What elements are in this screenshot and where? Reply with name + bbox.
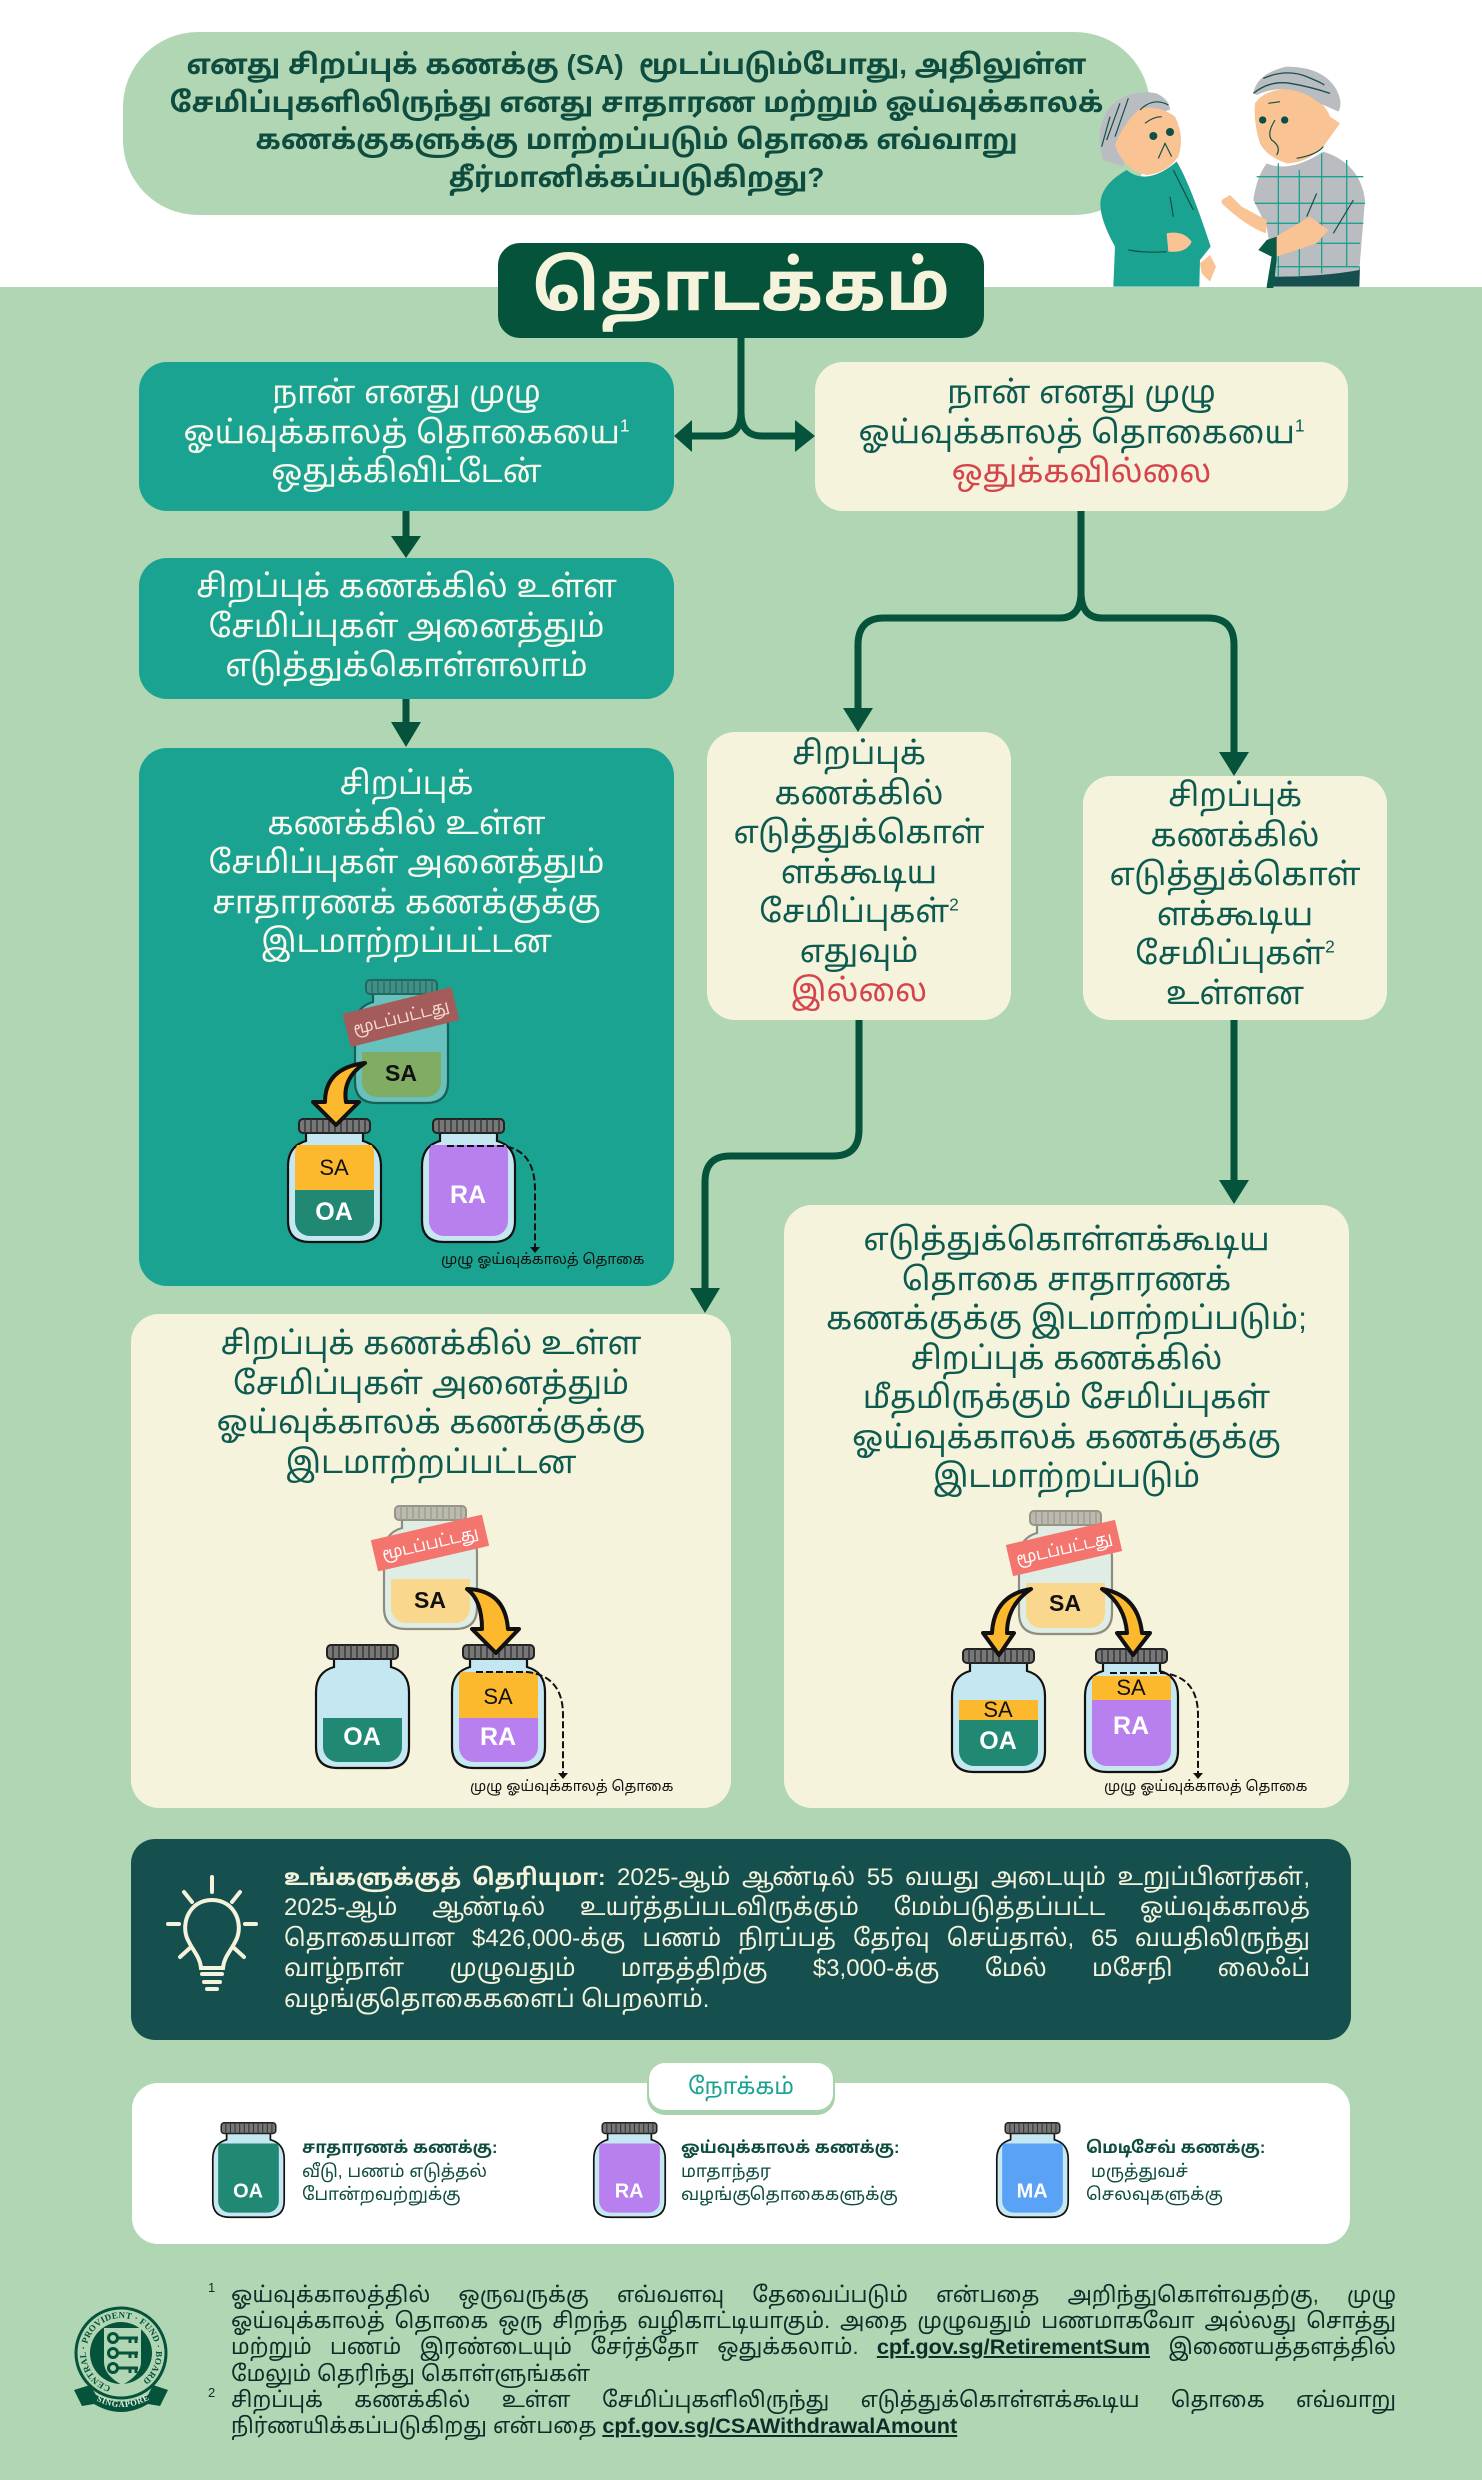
header question bubble: சேமிப்புகளிலிருந்து எனது சாதாரண மற்றும் ஓய்வுக்காலக்: [170, 86, 1103, 118]
caption: full retirement sum: முழு ஓய்வுக்காலத் தொகை: [470, 1779, 673, 1795]
panel: transferred to retirement account: ஓய்வுக்காலக் கணக்குக்கு: [217, 1404, 645, 1440]
jars diagram: [314, 1505, 568, 1779]
text: OA: [302, 2139, 498, 2206]
box: no withdrawable savings: சேமிப்புகள்2: [759, 893, 959, 929]
label: closed: மூடப்பட்டது: [380, 1524, 481, 1566]
jar: OA: [316, 1645, 409, 1768]
text: RA: ஓய்வுக்காலக் கணக்கு:: [681, 2139, 899, 2157]
jar: RA: [592, 2122, 666, 2218]
jar: OA: OA: [233, 2180, 263, 2202]
text: RA: வழங்குதொகைகளுக்கு: [681, 2184, 898, 2204]
jar: SA and OA: SA: [319, 1155, 349, 1180]
jar: SA and RA: RA: [480, 1723, 516, 1751]
box: can withdraw all: [139, 558, 674, 699]
dashed marker: [447, 1146, 535, 1248]
jar: closed SA: [355, 980, 448, 1103]
jar: closed SA: SA: [1049, 1590, 1081, 1616]
text: MA: மருத்துவச்: [1091, 2161, 1188, 2181]
jar: RA: RA: [615, 2180, 644, 2202]
box: no withdrawable savings: சிறப்புக்: [792, 735, 926, 771]
box: not set aside: [815, 362, 1348, 511]
box: no withdrawable savings: எடுத்துக்கொள்: [733, 814, 985, 850]
text: RA: [681, 2139, 899, 2206]
footnote 1: ஓய்வுக்காலத் தொகை ஒரு சிறந்த வழிகாட்டியாகும். அதை முழுவதும் பணமாகவோ அல்லது சொத்து: [231, 2308, 1396, 2333]
jar: OA: OA: [343, 1723, 381, 1751]
jar: closed SA: [1019, 1511, 1112, 1634]
box: has withdrawable savings: கணக்கில்: [1150, 816, 1320, 852]
footnote 2: 2: [208, 2385, 215, 2400]
text: did you know: உங்களுக்குத் தெரியுமா: 2025-ஆம் ஆண்டில் 55 வயது அடையும் உறுப்பினர்கள்,: [284, 1864, 1310, 1891]
box: set aside full retirement sum: [139, 362, 674, 511]
start title box: [498, 243, 984, 338]
logo: CPF board: CENTRAL · PROVIDENT · FUND · BOARD: [80, 2312, 162, 2392]
panel: transferred to retirement account: இடமாற்றப்பட்டன: [286, 1444, 576, 1480]
legend: ordinary account: [212, 2122, 498, 2218]
panel: did you know: [131, 1839, 1351, 2040]
panel: split transfer: ஓய்வுக்காலக் கணக்குக்கு: [852, 1418, 1281, 1454]
start title box: தொடக்கம்: [532, 248, 950, 325]
jar: RA: RA: [450, 1181, 486, 1209]
text: OA: சாதாரணக் கணக்கு:: [302, 2139, 498, 2157]
box: has withdrawable savings: உள்ளன: [1166, 974, 1304, 1010]
jar: closed SA: SA: [414, 1587, 446, 1613]
text: did you know: [284, 1864, 1310, 2015]
label: closed: மூடப்பட்டது: [351, 997, 452, 1041]
box: not set aside: ஒதுக்கவில்லை: [952, 453, 1211, 489]
jar: SA and OA: [288, 1119, 381, 1242]
label: closed: [343, 987, 459, 1047]
box: not set aside: ஓய்வுக்காலத் தொகையை1: [858, 414, 1304, 450]
panel: transferred to retirement account: சேமிப்புகள் அனைத்தும்: [233, 1364, 629, 1400]
text: MA: [1086, 2138, 1265, 2206]
arrow: SA to OA: [313, 1063, 365, 1125]
caption: full retirement sum: முழு ஓய்வுக்காலத் தொகை: [1104, 1779, 1307, 1795]
footnote 2: சிறப்புக் கணக்கில் உள்ள சேமிப்புகளிலிருந்து எடுத்துக்கொள்ளக்கூடிய தொகை எவ்வாறு: [231, 2387, 1396, 2412]
header question bubble: [123, 32, 1150, 215]
icon: light bulb: [166, 1875, 258, 1991]
arrow: SA to OA: [983, 1589, 1031, 1655]
box: no withdrawable savings: ளக்கூடிய: [781, 854, 937, 890]
jar: SA and RA: [1085, 1649, 1178, 1772]
panel: transferred to ordinary account: கணக்கில் உள்ள: [267, 804, 546, 840]
jar: closed SA: [384, 1506, 477, 1629]
jar: RA: [422, 1119, 515, 1242]
box: set aside full retirement sum: ஓய்வுக்காலத் தொகையை1: [184, 414, 629, 450]
panel: split transfer: கணக்குக்கு இடமாற்றப்படும்;: [826, 1300, 1307, 1336]
text: OA: வீடு, பணம் எடுத்தல்: [302, 2161, 487, 2181]
panel: transferred to ordinary account: இடமாற்றப்பட்டன: [261, 923, 552, 959]
jar: SA and RA: RA: [1113, 1712, 1149, 1740]
footnote 1: மேலும் தெரிந்து கொள்ளுங்கள்: [231, 2361, 590, 2386]
box: no withdrawable savings: கணக்கில்: [774, 774, 944, 810]
box: has withdrawable savings: ளக்கூடிய: [1157, 896, 1313, 932]
header question bubble: கணக்குகளுக்கு மாற்றப்படும் தொகை எவ்வாறு: [255, 124, 1018, 155]
panel: transferred to ordinary account: சேமிப்புகள் அனைத்தும்: [208, 844, 605, 880]
panel: split transfer: எடுத்துக்கொள்ளக்கூடிய: [863, 1221, 1270, 1257]
label: closed: [371, 1515, 489, 1571]
footnote 1: [208, 2280, 1396, 2388]
dashed marker: [1110, 1673, 1198, 1774]
box: no withdrawable savings: இல்லை: [791, 972, 927, 1008]
label: closed: மூடப்பட்டது: [1014, 1529, 1115, 1571]
panel: split transfer: சிறப்புக் கணக்கில்: [911, 1340, 1222, 1376]
jar: SA and RA: SA: [1116, 1675, 1146, 1700]
label: closed: [1006, 1520, 1122, 1576]
man: [1222, 67, 1365, 288]
text: MA: மெடிசேவ் கணக்கு:: [1086, 2139, 1265, 2157]
box: not set aside: நான் எனது முழு: [947, 374, 1216, 410]
woman: [1100, 92, 1216, 287]
box: has withdrawable savings: [1083, 776, 1387, 1020]
footnote 2: நிர்ணயிக்கப்படுகிறது என்பதை cpf.gov.sg/CSAWithdrawalAmount: [231, 2413, 957, 2438]
box: set aside full retirement sum: நான் எனது முழு: [272, 374, 541, 410]
footnote 1: ஓய்வுக்காலத்தில் ஒருவருக்கு எவ்வளவு தேவைப்படும் என்பதை அறிந்துகொள்வதற்கு, முழு: [231, 2282, 1396, 2307]
text: OA: போன்றவற்றுக்கு: [302, 2184, 461, 2204]
box: no withdrawable savings: எதுவும்: [800, 932, 918, 968]
box: has withdrawable savings: எடுத்துக்கொள்: [1109, 856, 1361, 892]
jar: SA and RA: SA: [483, 1684, 513, 1709]
tab: purpose: நோக்கம்: [688, 2073, 794, 2099]
jar: MA: MA: [1017, 2180, 1048, 2202]
panel: transferred to retirement account: [131, 1314, 731, 1808]
panel: split transfer: தொகை சாதாரணக்: [902, 1260, 1231, 1296]
logo: CPF board: SINGAPORE: [96, 2395, 149, 2407]
text: did you know: 2025-ஆம் ஆண்டில் உயர்த்தப்படவிருக்கும் மேம்படுத்தப்பட்ட ஓய்வுக்காலத்: [284, 1894, 1310, 1921]
legend: medisave account: [996, 2122, 1265, 2218]
box: set aside full retirement sum: ஒதுக்கிவிட்டேன்: [271, 453, 542, 489]
jar: SA and OA: OA: [315, 1198, 353, 1226]
legend: retirement account: [592, 2122, 899, 2218]
jars diagram: [950, 1510, 1203, 1779]
arrow: SA to RA: [1102, 1589, 1150, 1655]
box: no withdrawable savings: [707, 732, 1011, 1020]
text: did you know: வழங்குதொகைகளைப் பெறலாம்.: [284, 1986, 709, 2013]
illustration: elderly couple: [1100, 66, 1365, 288]
footnote 2: [208, 2385, 1396, 2440]
text: RA: மாதாந்தர: [681, 2161, 771, 2181]
arrow: SA to RA: [467, 1589, 519, 1653]
panel: transferred to ordinary account: [139, 748, 674, 1286]
box: has withdrawable savings: சிறப்புக்: [1168, 777, 1302, 813]
jar: SA and OA: OA: [979, 1727, 1017, 1755]
jar: MA: [996, 2122, 1070, 2218]
text: did you know: வாழ்நாள் முழுவதும் மாதத்திற்கு $3,000-க்கு மேல் மசேநி லைஃப்: [284, 1955, 1310, 1982]
panel: transferred to ordinary account: சாதாரணக் கணக்குக்கு: [212, 884, 601, 920]
box: can withdraw all: சிறப்புக் கணக்கில் உள்ள: [196, 568, 617, 604]
jar: SA and OA: [952, 1649, 1045, 1772]
tab: purpose: [649, 2063, 833, 2110]
footnote 1: மற்றும் பணம் இரண்டையும் சேர்த்தோ ஒதுக்கலாம். cpf.gov.sg/RetirementSum இணையத்தளத்தில்: [231, 2334, 1396, 2359]
header question bubble: எனது சிறப்புக் கணக்கு (SA) மூடப்படும்போது, அதிலுள்ள: [187, 49, 1086, 80]
caption: full retirement sum: முழு ஓய்வுக்காலத் தொகை: [441, 1252, 644, 1268]
box: can withdraw all: சேமிப்புகள் அனைத்தும்: [208, 608, 605, 644]
jar: SA and OA: SA: [983, 1697, 1013, 1722]
panel: split transfer: இடமாற்றப்படும்: [933, 1458, 1200, 1494]
jar: closed SA: SA: [385, 1060, 417, 1086]
footnote 1: 1: [208, 2280, 215, 2295]
footnotes: [208, 2280, 1396, 2440]
panel: purpose legend: [132, 2083, 1350, 2244]
panel: transferred to retirement account: சிறப்புக் கணக்கில் உள்ள: [221, 1325, 641, 1361]
jar: SA and RA: [452, 1645, 545, 1768]
box: has withdrawable savings: சேமிப்புகள்2: [1135, 935, 1335, 971]
jars diagram: [286, 979, 540, 1253]
dashed marker: [476, 1672, 563, 1774]
box: can withdraw all: எடுத்துக்கொள்ளலாம்: [225, 647, 588, 683]
header question bubble: தீர்மானிக்கப்படுகிறது?: [449, 162, 824, 192]
jar: OA: [212, 2122, 286, 2218]
panel: split transfer: [784, 1205, 1349, 1808]
panel: transferred to ordinary account: சிறப்புக்: [340, 765, 473, 801]
text: MA: செலவுகளுக்கு: [1086, 2184, 1223, 2204]
text: did you know: தொகையான $426,000-க்கு பணம் நிரப்பத் தேர்வு செய்தால், 65 வயதிலிருந்து: [284, 1925, 1310, 1952]
panel: split transfer: மீதமிருக்கும் சேமிப்புகள்: [863, 1379, 1270, 1415]
